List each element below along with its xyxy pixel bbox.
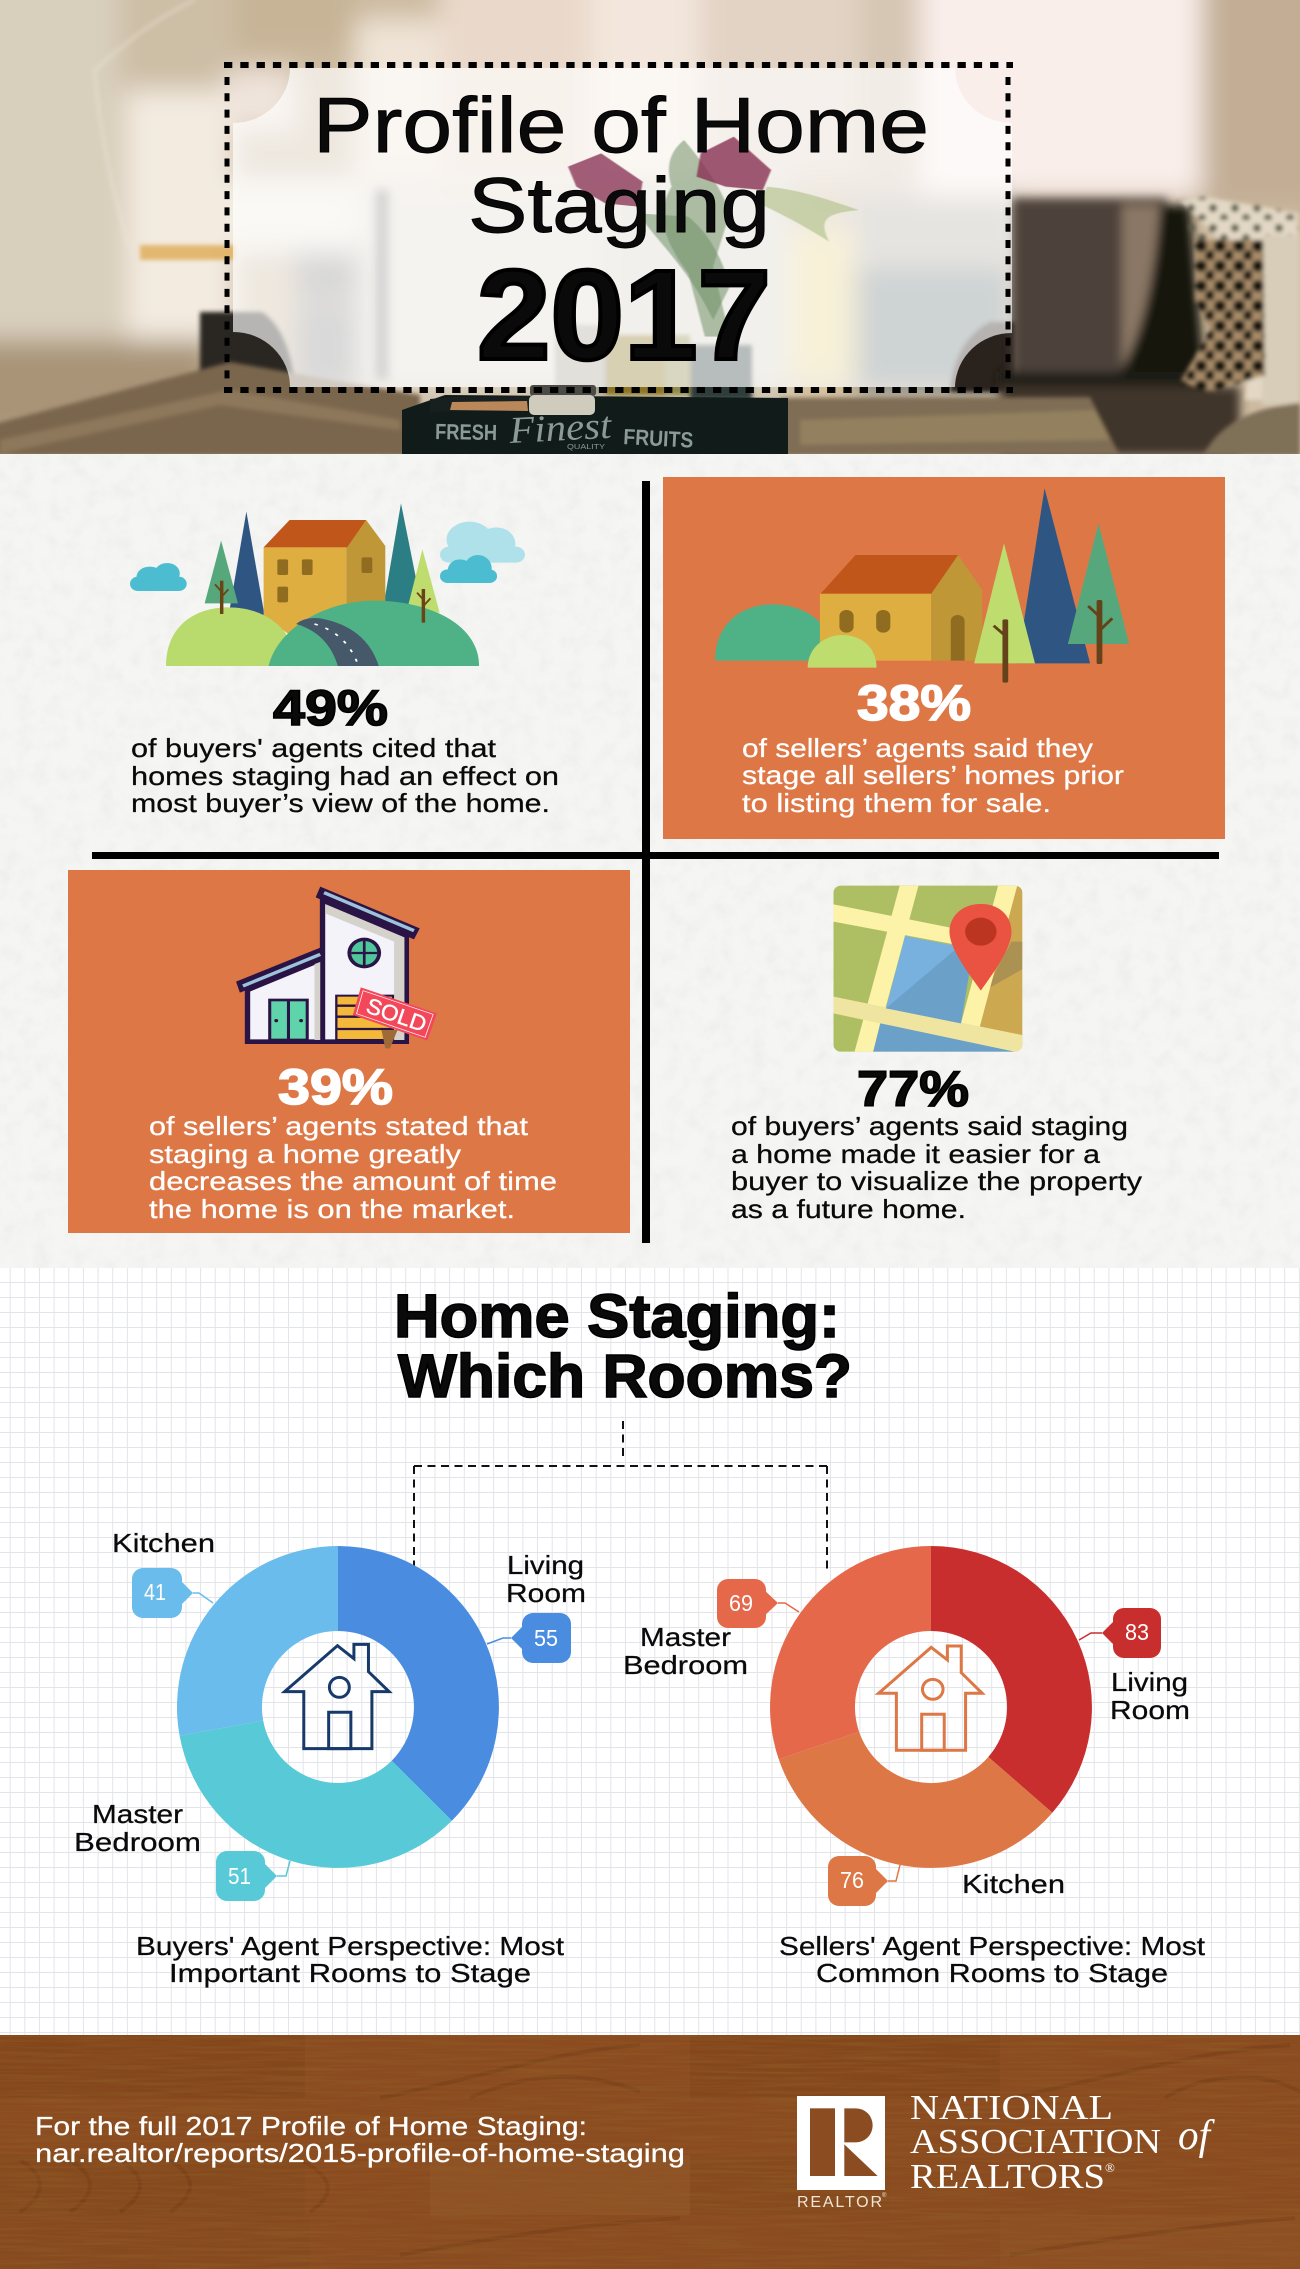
footer wood banner — [0, 2035, 1300, 2269]
icon: map with pin — [834, 886, 1027, 1053]
quadrant divider lines — [92, 481, 1219, 1243]
pillow stripe behind panel — [376, 190, 388, 380]
labels: Room — [1110, 1695, 1190, 1725]
stat: 38%: 38% — [857, 675, 971, 731]
text block — [742, 733, 1124, 818]
labels: Master — [640, 1622, 731, 1652]
national association of realtors wordmark: NATIONAL — [910, 2088, 1113, 2127]
labels: Living — [507, 1550, 584, 1580]
icon: house outline — [285, 1644, 389, 1749]
labels: Master — [92, 1799, 183, 1829]
crate with label: Finest — [507, 405, 614, 452]
wooden table left — [0, 362, 420, 456]
panel: 39% sellers' agents — [68, 870, 630, 1233]
labels: Bedroom — [74, 1827, 201, 1857]
crate with label: QUALITY — [567, 444, 605, 451]
title — [313, 81, 929, 387]
icon: house outline — [879, 1646, 982, 1750]
text block: as a future home. — [731, 1194, 966, 1224]
callout: 76: 76 — [840, 1867, 864, 1893]
title panel: translucent ticket — [233, 68, 1012, 387]
panel: 38% sellers' agents — [663, 477, 1225, 839]
dark sofa left and right corners — [196, 308, 295, 376]
stat: 39%: 39% — [278, 1059, 393, 1115]
text block: homes staging had an effect on — [131, 761, 559, 791]
title: Profile of Home — [313, 81, 929, 169]
crate with label: FRUITS — [623, 424, 694, 453]
text block: decreases the amount of time — [149, 1166, 557, 1196]
caption: Common Rooms to Stage — [816, 1958, 1168, 1988]
caption: Buyers' Agent Perspective: Most — [136, 1931, 565, 1961]
icon: house with trees — [715, 488, 1129, 683]
panel: 77% buyers' agents — [731, 886, 1142, 1224]
heading: which rooms: Which Rooms? — [398, 1342, 852, 1410]
segment: master bedroom 69 — [770, 1546, 931, 1759]
callout: 83 — [1079, 1608, 1161, 1658]
callout: 55 — [487, 1613, 571, 1663]
segment: kitchen 41 — [177, 1546, 338, 1736]
text block — [131, 733, 559, 818]
text block: of buyers’ agents said staging — [731, 1111, 1128, 1141]
labels: Bedroom — [623, 1650, 748, 1680]
callout: 76 — [828, 1856, 900, 1906]
caption: Important Rooms to Stage — [169, 1958, 531, 1988]
callout: 51: 51 — [228, 1863, 251, 1889]
labels: Kitchen — [962, 1869, 1065, 1899]
national association of realtors wordmark: ® — [1105, 2160, 1115, 2175]
crate with label — [402, 385, 788, 454]
text block: to listing them for sale. — [742, 788, 1051, 818]
title: 2017 — [477, 244, 771, 387]
header photo banner — [0, 0, 1300, 500]
sofa back — [1012, 198, 1167, 388]
ottoman — [1203, 403, 1300, 456]
patterned pillow — [1180, 197, 1300, 400]
flowers behind title — [568, 137, 859, 337]
callout: 41: 41 — [144, 1579, 166, 1605]
caption — [136, 1931, 565, 1988]
text block: of sellers’ agents stated that — [149, 1111, 529, 1141]
icon: sold house — [236, 887, 437, 1048]
labels: Kitchen — [112, 1528, 215, 1558]
labels — [623, 1622, 1190, 1899]
text block — [149, 1111, 557, 1224]
caption: Sellers' Agent Perspective: Most — [779, 1931, 1206, 1961]
rooms section background grid — [0, 1268, 1300, 2036]
text block: of buyers' agents cited that — [131, 733, 497, 763]
callout: 69: 69 — [729, 1590, 753, 1616]
vase under panel — [555, 325, 752, 400]
footer call to action — [35, 2111, 685, 2168]
text block: staging a home greatly — [149, 1139, 461, 1169]
footer call to action: nar.realtor/reports/2015-profile-of-home-staging — [35, 2138, 685, 2168]
callout: 51 — [216, 1851, 290, 1901]
segment: master bedroom 51 — [180, 1721, 452, 1868]
icon: houses on hills — [130, 503, 525, 666]
national association of realtors wordmark: of — [1178, 2113, 1215, 2159]
crate text: FRESH — [435, 419, 497, 445]
candle jar — [530, 385, 596, 396]
realtor logo: ® — [882, 2192, 887, 2199]
text block: of sellers’ agents said they — [742, 733, 1093, 763]
labels — [74, 1528, 586, 1857]
heading: which rooms: Home Staging: — [394, 1282, 840, 1350]
realtor logo — [797, 2096, 887, 2211]
dotted title frame — [224, 65, 1013, 390]
footer call to action: For the full 2017 Profile of Home Staging: — [35, 2111, 587, 2141]
realtor logo: REALTOR — [797, 2194, 882, 2211]
caption — [779, 1931, 1206, 1988]
stat: 77%: 77% — [857, 1061, 969, 1117]
wooden table right — [780, 397, 1120, 456]
callout: 83: 83 — [1125, 1619, 1149, 1645]
text block: most buyer’s view of the home. — [131, 788, 550, 818]
national association of realtors wordmark: ASSOCIATION — [910, 2122, 1161, 2161]
text block: stage all sellers’ homes prior — [742, 760, 1124, 790]
segment: kitchen 76 — [779, 1732, 1052, 1868]
callout: 41 — [132, 1568, 213, 1618]
callout: 55: 55 — [534, 1625, 558, 1651]
national association of realtors wordmark: REALTORS — [910, 2157, 1105, 2196]
lamp arc — [114, 0, 194, 54]
labels: Living — [1111, 1667, 1188, 1697]
stat: 49%: 49% — [273, 680, 388, 736]
panel: 49% buyers' agents view — [130, 503, 559, 818]
sold sign text: SOLD — [363, 993, 430, 1037]
national association of realtors wordmark — [910, 2088, 1215, 2196]
cork label — [450, 401, 528, 411]
donut chart: buyers' perspective — [74, 1528, 586, 1988]
heading: which rooms — [394, 1282, 852, 1410]
stats section background — [0, 454, 1300, 1268]
title: Staging — [468, 161, 770, 249]
dashed connector bracket — [414, 1421, 827, 1570]
text block: a home made it easier for a — [731, 1139, 1101, 1169]
callout: 69 — [717, 1579, 799, 1628]
donut chart: sellers' perspective — [623, 1546, 1206, 1988]
segment: living room 83 — [931, 1546, 1092, 1813]
text block — [731, 1111, 1142, 1224]
text block: buyer to visualize the property — [731, 1166, 1142, 1196]
orange tag on wall — [140, 245, 235, 260]
labels: Room — [506, 1578, 586, 1608]
text block: the home is on the market. — [149, 1194, 515, 1224]
segment: living room 55 — [338, 1546, 499, 1821]
